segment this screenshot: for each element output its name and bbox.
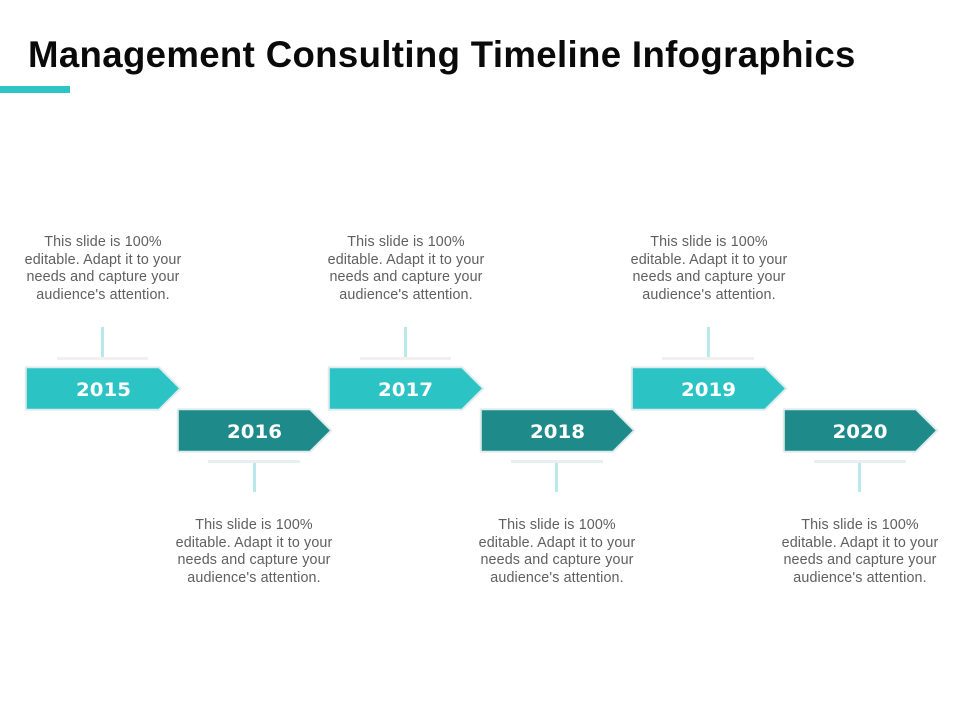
text: 2015 description: This slide is 100%: [44, 234, 162, 250]
milestone 2015: 2015: [76, 380, 131, 401]
text: 2020 description: [782, 517, 938, 586]
title: Management Consulting Timeline Infographics: [28, 34, 856, 75]
text: 2019 description: [631, 234, 787, 303]
text: 2016 description: This slide is 100%: [195, 517, 313, 533]
text: 2015 description: editable. Adapt it to your: [25, 252, 181, 268]
text: 2015 description: [25, 234, 181, 303]
text: 2020 description: editable. Adapt it to your: [782, 535, 938, 551]
text: 2016 description: editable. Adapt it to your: [176, 535, 332, 551]
text: 2017 description: [328, 234, 484, 303]
text: 2019 description: audience's attention.: [642, 287, 776, 303]
text: 2016 description: [176, 517, 332, 586]
text: 2018 description: audience's attention.: [490, 570, 624, 586]
milestone 2016: [178, 410, 331, 492]
text: 2019 description: This slide is 100%: [650, 234, 768, 250]
text: 2019 description: editable. Adapt it to your: [631, 252, 787, 268]
milestone 2017: [329, 327, 483, 410]
milestone 2018: [481, 410, 634, 492]
text: 2016 description: audience's attention.: [187, 570, 321, 586]
text: 2017 description: needs and capture your: [329, 269, 483, 285]
milestone 2016: 2016: [227, 422, 282, 443]
text: 2017 description: audience's attention.: [339, 287, 473, 303]
text: 2020 description: needs and capture your: [783, 552, 937, 568]
milestone 2015: [26, 327, 180, 410]
milestone 2019: [632, 327, 786, 410]
text: 2020 description: This slide is 100%: [801, 517, 919, 533]
text: 2016 description: needs and capture your: [177, 552, 331, 568]
title accent bar: [0, 86, 70, 93]
milestone 2020: 2020: [832, 422, 888, 443]
text: 2017 description: editable. Adapt it to your: [328, 252, 484, 268]
text: 2020 description: audience's attention.: [793, 570, 927, 586]
text: 2018 description: needs and capture your: [480, 552, 634, 568]
milestone 2017: 2017: [378, 380, 433, 401]
text: 2019 description: needs and capture your: [632, 269, 786, 285]
text: 2015 description: needs and capture your: [26, 269, 180, 285]
text: 2017 description: This slide is 100%: [347, 234, 465, 250]
milestone 2018: 2018: [530, 422, 585, 443]
text: 2018 description: This slide is 100%: [498, 517, 616, 533]
milestone 2019: 2019: [681, 380, 736, 401]
text: 2015 description: audience's attention.: [36, 287, 170, 303]
milestone 2020: [784, 410, 937, 492]
text: 2018 description: editable. Adapt it to your: [479, 535, 635, 551]
text: 2018 description: [479, 517, 635, 586]
